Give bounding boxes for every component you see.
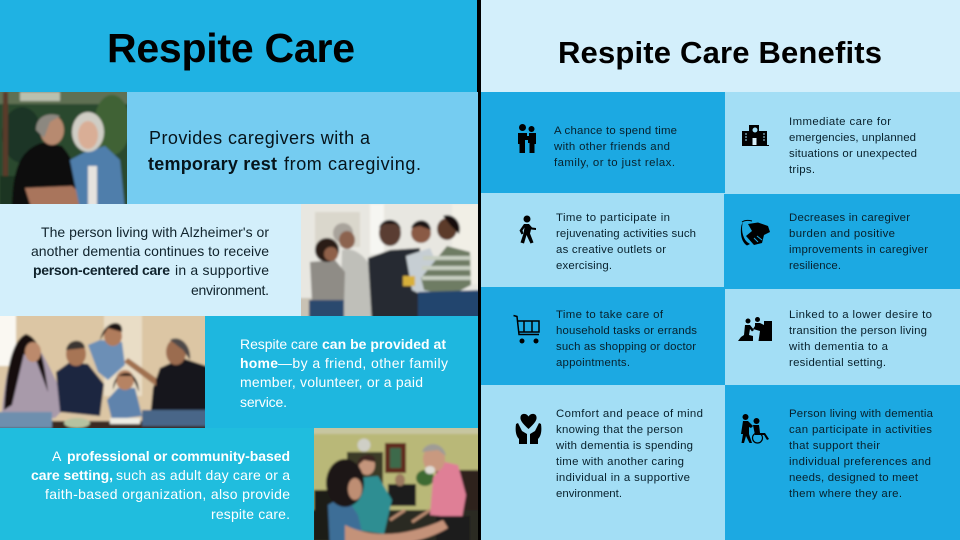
icon: handshake [741,220,770,246]
text: caregiver burden: Decreases in caregiver [789,212,910,224]
text: individual preferences: can participate in activities [789,424,932,436]
text: immediate care [789,116,917,176]
panel: benefit – household tasks [481,287,725,385]
text: household tasks [556,309,697,369]
text: rejuvenating activities: exercising. [556,260,612,272]
text: person-centered care: another dementia continues to receive [31,243,269,259]
text: peace of mind: time with another caring [556,456,684,468]
icon: person pushing wheelchair [741,414,769,443]
panel: benefit – peace of mind [481,385,725,540]
panel: benefit – rejuvenating activities [481,193,725,287]
text: rejuvenating activities: as creative outlets or [556,244,666,256]
text: friends and family [553,125,677,169]
text: residential setting [788,309,932,369]
text: individual preferences: individual preferences and [789,456,931,468]
panel: provided at home [205,316,478,428]
text: provided at home: can be provided at [322,336,446,352]
text: peace of mind: individual in a supportive [556,472,690,484]
panel: person-centered care [0,204,301,316]
text: rejuvenating activities: Time to participate in [556,212,670,224]
panel: left header [0,0,477,92]
text: temporary rest [148,128,421,174]
panel: benefit – residential setting [725,289,960,385]
text: community-based setting: care setting, [31,467,113,483]
text: community-based setting: professional or community-based [67,448,290,464]
panel: benefit – caregiver burden [724,194,960,289]
text: provided at home: member, volunteer, or a paid [240,374,423,390]
icon: shopping cart [514,316,539,344]
text: household tasks: household tasks or errands [556,325,697,337]
text: caregiver burden: burden and positive [789,228,895,240]
photo: family on sofa [301,204,478,316]
text: individual preferences [789,408,934,500]
photo: older couple [0,92,127,204]
text: peace of mind: Comfort and peace of mind [556,408,703,420]
text: community-based setting [31,448,290,522]
text: rejuvenating activities: rejuvenating activities such [556,228,696,240]
text: immediate care: trips. [789,164,815,176]
text: person-centered care [31,224,269,298]
photo: family at home [0,316,205,428]
panel: benefit – individual preferences [725,385,960,540]
icon: caregiver kneeling by seated person [738,317,772,341]
text: individual preferences: that support their [789,440,880,452]
panel: temporary rest [127,92,478,204]
panel: benefit – immediate care [725,92,960,194]
text: caregiver burden: resilience. [789,260,841,272]
text: temporary rest: from caregiving. [284,154,421,174]
panel: community-based setting [0,428,314,540]
text: provided at home: —by a friend, other family [278,355,448,371]
text: individual preferences: needs, designed to meet [789,472,919,484]
text: community-based setting: such as adult day care or a [116,467,290,483]
icon: two people [518,124,536,153]
text: residential setting: Linked to a lower desire to [789,309,932,321]
text: community-based setting: respite care. [211,506,290,522]
text: person-centered care: person-centered care [33,262,170,278]
text: person-centered care: in a supportive [175,262,269,278]
text: temporary rest: temporary rest [148,154,277,174]
text: rejuvenating activities [556,212,696,272]
icon: hospital [742,125,769,146]
text: friends and family: with other friends and [553,141,670,153]
text: provided at home: service. [240,394,287,410]
icon: walking person [520,216,536,244]
text: provided at home: home [240,355,278,371]
text: peace of mind: environment. [556,488,622,500]
text: friends and family: A chance to spend time [554,125,677,137]
text: peace of mind: with dementia is spending [555,440,693,452]
text: household tasks: appointments. [556,357,630,369]
text: community-based setting: faith-based organization, also provide [45,486,290,502]
panel: benefit – friends and family [481,92,725,193]
text: immediate care: Immediate care for [789,116,891,128]
panel: right header [481,0,960,92]
text: peace of mind [555,408,703,500]
text: peace of mind: knowing that the person [556,424,683,436]
text: immediate care: emergencies, unplanned [789,132,916,144]
text: person-centered care: environment. [191,282,269,298]
text: community-based setting: A [52,448,62,464]
text: provided at home [240,336,448,410]
title: Respite Care Benefits: Respite Care Benefits [558,35,882,70]
text: residential setting: residential setting. [789,357,886,369]
icon: hands holding heart [516,414,541,444]
text: provided at home: Respite care [240,336,318,352]
text: friends and family: family, or to just relax. [554,157,675,169]
text: residential setting: transition the person living [789,325,927,337]
text: residential setting: with dementia to a [788,341,889,353]
text: household tasks: Time to take care of [556,309,664,321]
text: household tasks: such as shopping or doctor [556,341,696,353]
photo: people dancing [314,428,478,540]
text: caregiver burden [789,212,928,272]
text: individual preferences: Person living with dementia [789,408,934,420]
title: Respite Care: Respite Care [107,25,355,71]
text: person-centered care: The person living with Alzheimer's or [41,224,269,240]
text: individual preferences: them where they are. [789,488,902,500]
text: caregiver burden: improvements in caregiver [789,244,928,256]
text: immediate care: situations or unexpected [789,148,917,160]
text: temporary rest: Provides caregivers with a [149,128,371,148]
